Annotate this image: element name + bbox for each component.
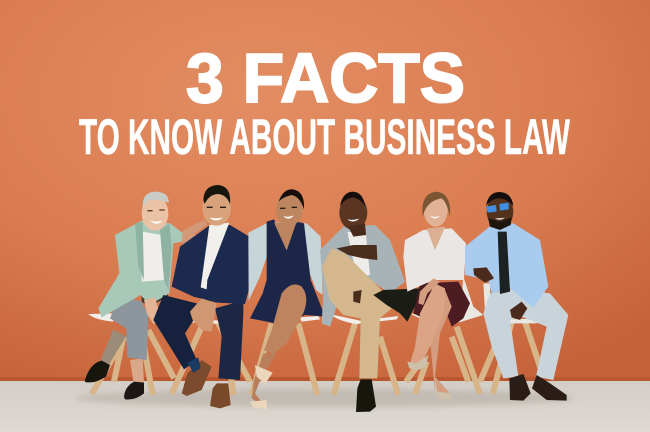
chair seats <box>88 313 113 322</box>
chairs 4 to 6 <box>333 320 543 395</box>
person 6: man in blue shirt with glasses <box>465 192 568 401</box>
person 5: woman in striped shirt and burgundy skirt <box>403 192 470 399</box>
people on chairs, right group <box>320 192 568 412</box>
person 4: man in grey blazer and beige trousers <box>320 192 420 412</box>
person 1: silver-haired woman <box>85 192 207 400</box>
floor <box>0 381 650 432</box>
headline: 3 facts: 3 FACTS <box>186 39 465 117</box>
seats <box>329 314 398 324</box>
people on chairs, left group <box>85 185 325 409</box>
skirting shadow <box>0 377 650 381</box>
person 2: man in navy suit <box>153 185 256 408</box>
person 3: woman in navy dress <box>248 189 325 409</box>
floor shadows under the group <box>75 389 575 407</box>
chair legs 1 to 3 <box>92 323 317 395</box>
